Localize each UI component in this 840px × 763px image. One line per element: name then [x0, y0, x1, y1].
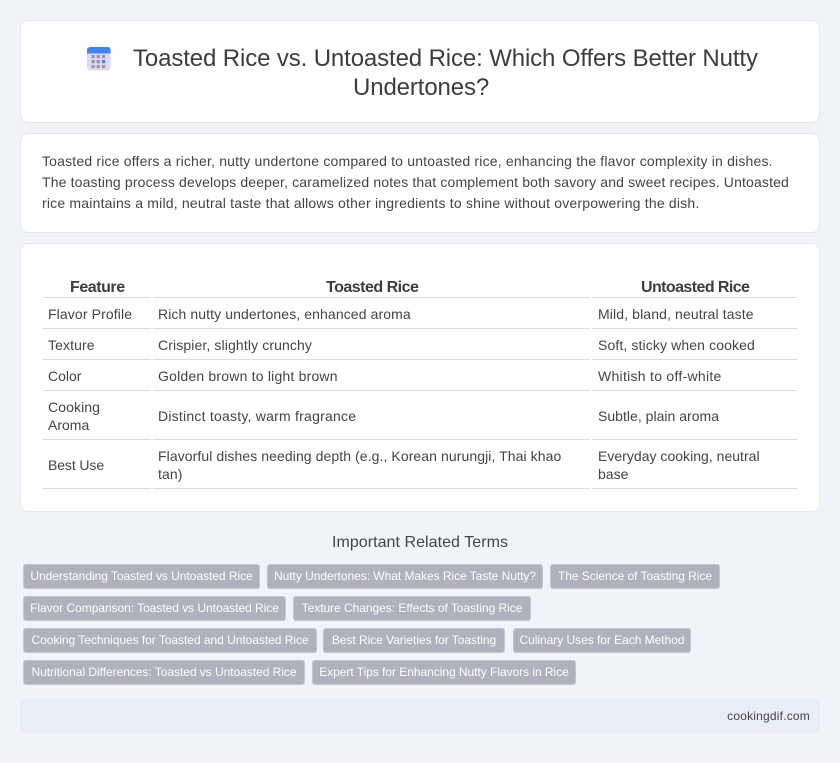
table header: Feature [70, 279, 125, 296]
tag: Nutritional Differences: Toasted vs Untoasted Rice [31, 665, 297, 679]
table header: Toasted Rice [326, 279, 418, 296]
tag: Best Rice Varieties for Toasting [332, 633, 496, 647]
row: texture: Soft, sticky when cooked [598, 337, 755, 353]
tag: Understanding Toasted vs Untoasted Rice [30, 569, 253, 583]
title [133, 45, 758, 101]
tag: Texture Changes: Effects of Toasting Rice [302, 601, 522, 615]
row: flavor profile: Rich nutty undertones, enhanced aroma [158, 306, 411, 322]
tag: The Science of Toasting Rice [558, 569, 712, 583]
related terms heading: Important Related Terms [332, 534, 508, 551]
row: color [48, 368, 722, 384]
title: Toasted Rice vs. Untoasted Rice: Which Offers Better Nutty [133, 45, 758, 72]
row: flavor profile: Mild, bland, neutral taste [598, 306, 754, 322]
tag: Culinary Uses for Each Method [520, 633, 684, 647]
tag: Nutty Undertones: What Makes Rice Taste Nutty? [274, 569, 536, 583]
tag [550, 564, 720, 589]
tag: Flavor Comparison: Toasted vs Untoasted Rice [30, 601, 279, 615]
row: texture: Texture [48, 337, 95, 353]
intro text [42, 153, 789, 211]
intro text: Toasted rice offers a richer, nutty undertone compared to untoasted rice, enhancing the flavor complexity in dishes. [42, 153, 773, 169]
row: cooking aroma: Distinct toasty, warm fragrance [158, 408, 356, 424]
table header: Untoasted Rice [641, 279, 749, 296]
row: texture: Crispier, slightly crunchy [158, 337, 312, 353]
tag [23, 660, 305, 685]
row: cooking aroma: Cooking [48, 399, 100, 415]
row: color: Color [48, 368, 81, 384]
footer bar [20, 699, 820, 733]
title: Undertones? [353, 74, 489, 101]
intro text: The toasting process develops deeper, caramelized notes that complement both savory and sweet recipes. Untoasted [42, 174, 789, 190]
tag [293, 596, 531, 621]
tag [23, 564, 260, 589]
tag [23, 596, 286, 621]
row: best use: Best Use [48, 457, 104, 473]
intro text: rice maintains a mild, neutral taste that allows other ingredients to shine without overpowering the dish. [42, 195, 699, 211]
tag [267, 564, 543, 589]
row: color: Golden brown to light brown [158, 368, 338, 384]
row: best use: Everyday cooking, neutral [598, 448, 760, 464]
tag list [23, 564, 720, 685]
tag: Cooking Techniques for Toasted and Untoasted Rice [31, 633, 309, 647]
tag [323, 628, 505, 653]
footer credit: cookingdif.com [727, 709, 810, 723]
tag: Expert Tips for Enhancing Nutty Flavors in Rice [319, 665, 569, 679]
row: flavor profile: Flavor Profile [48, 306, 132, 322]
intro panel [20, 133, 820, 233]
row: cooking aroma: Subtle, plain aroma [598, 408, 719, 424]
comparison table panel [20, 243, 820, 512]
row: best use: tan) [158, 466, 183, 482]
row: best use: Flavorful dishes needing depth (e.g., Korean nurungji, Thai khao [158, 448, 561, 464]
row: cooking aroma: Aroma [48, 417, 89, 433]
icon: calendar [87, 47, 111, 70]
row: flavor profile [48, 306, 754, 322]
row: best use [48, 448, 760, 482]
tag [312, 660, 576, 685]
row: texture [48, 337, 755, 353]
row: color: Whitish to off-white [598, 368, 722, 384]
tag [23, 628, 317, 653]
tag [513, 628, 691, 653]
row: cooking aroma [48, 399, 720, 433]
header panel [20, 20, 820, 123]
table header [70, 279, 750, 296]
row: best use: base [598, 466, 628, 482]
